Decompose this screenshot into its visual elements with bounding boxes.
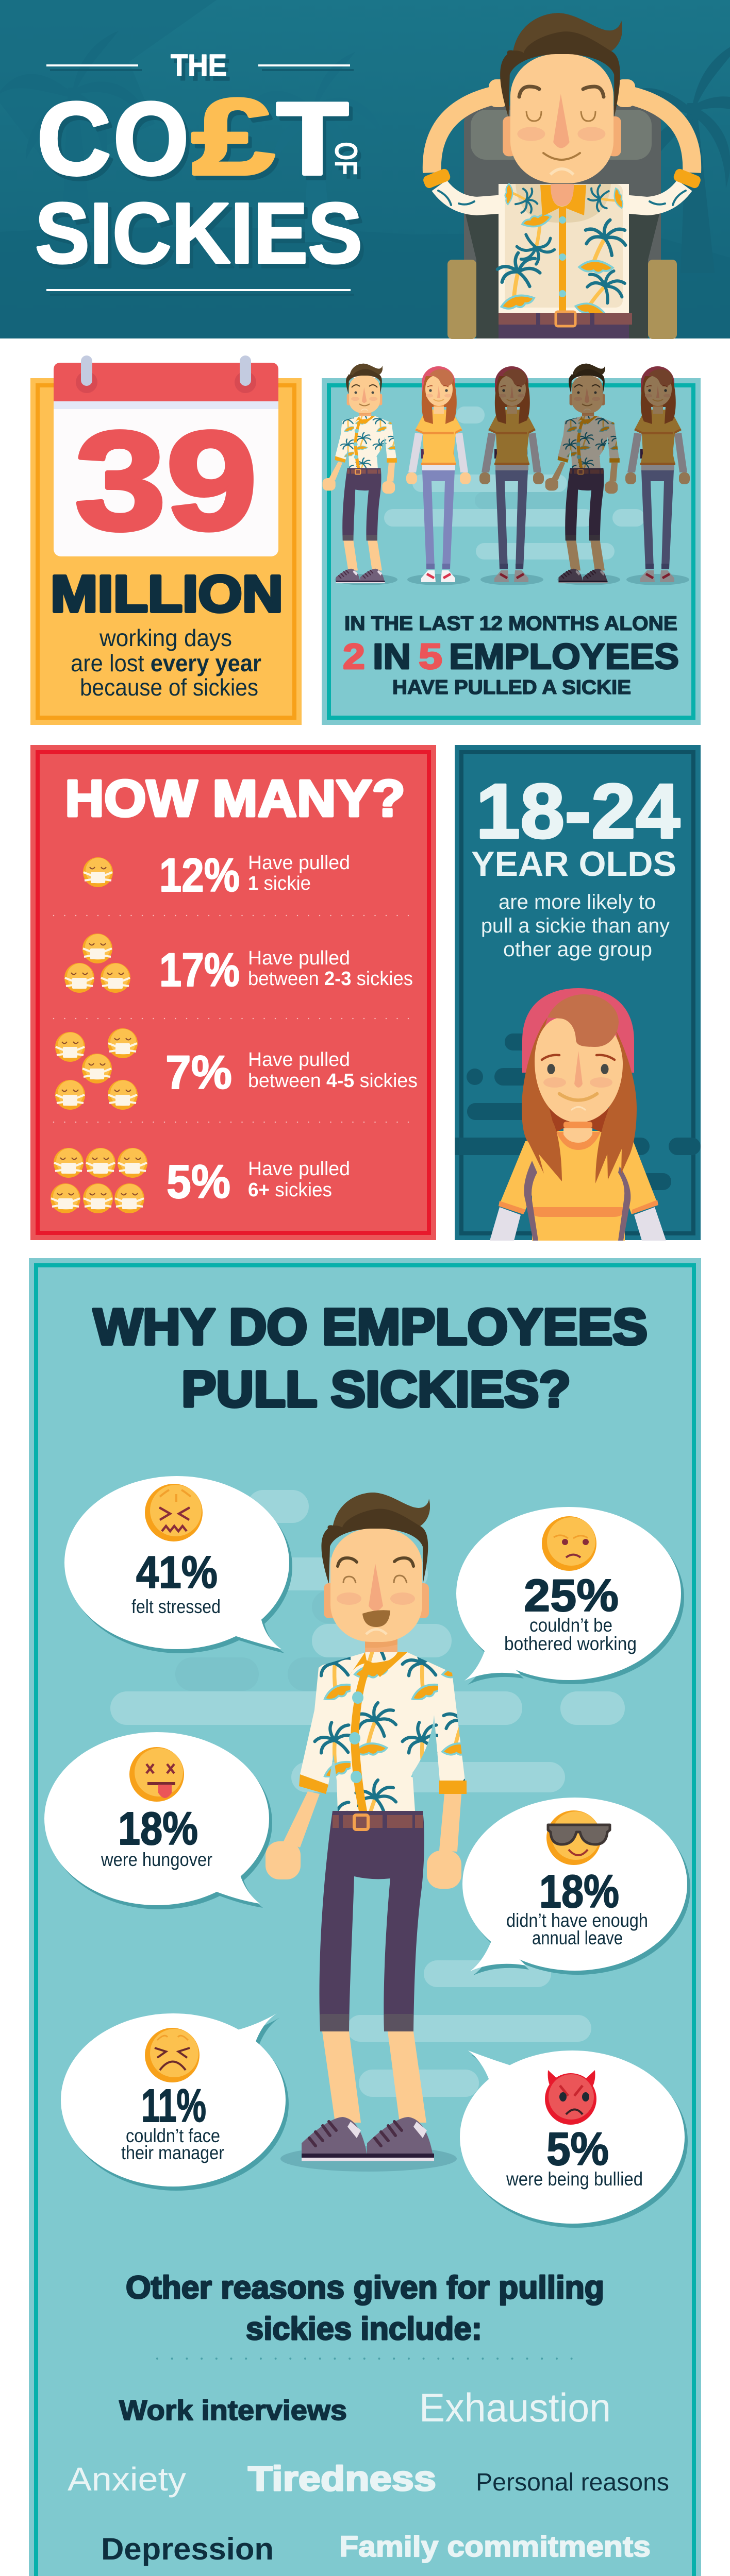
bubble: 25 percent could not be bothered: couldn’t be	[529, 1615, 612, 1636]
bubble: 5 percent bullied: were being bullied	[506, 2168, 643, 2190]
icon: shirt palm print	[494, 182, 630, 324]
heading: why do employees: WHY DO EMPLOYEES	[93, 1298, 648, 1355]
row: 17 percent: 17%	[159, 944, 240, 996]
row: 5 percent	[51, 1148, 350, 1213]
title: O	[113, 81, 189, 196]
row: 7 percent	[55, 1028, 418, 1110]
text: last 12 months	[343, 613, 679, 699]
heading: how many: HOW MANY?	[65, 770, 405, 827]
heading: why do employees	[93, 1298, 648, 1417]
text: working days lost: because of sickies	[80, 674, 258, 701]
bubble: 41 percent felt stressed	[64, 1476, 289, 1649]
word cloud: other reasons	[68, 2385, 669, 2566]
bubble: 41 percent felt stressed: 41%	[136, 1547, 218, 1598]
illustration: young woman	[490, 988, 666, 1241]
bubble: 18 percent annual leave: didn’t have enough	[506, 1910, 648, 1931]
bubble: 41 percent felt stressed: felt stressed	[131, 1596, 221, 1617]
heading: million: MILLION	[51, 565, 283, 623]
row: 17 percent: Have pulled	[248, 947, 350, 969]
row: 17 percent	[64, 934, 413, 996]
bubble: 11 percent could not face manager	[61, 2013, 286, 2187]
bubble: 25 percent could not be bothered: 25%	[524, 1570, 619, 1621]
row: 5 percent: 6+ sickies	[248, 1179, 332, 1201]
row: 7 percent: Have pulled	[248, 1049, 350, 1071]
title: SICKIES	[35, 185, 362, 281]
illustration: laughing man	[266, 1493, 467, 2172]
bubble: 18 percent annual leave: annual leave	[532, 1927, 623, 1948]
bubble: 18 percent hungover: 18%	[118, 1803, 198, 1855]
text: last 12 months: IN	[373, 636, 411, 676]
header banner	[0, 0, 730, 339]
heading: other reasons: sickies include:	[246, 2311, 482, 2347]
row: 12 percent: 12%	[159, 849, 240, 902]
bubble: 11 percent could not face manager: couldn’t face	[126, 2125, 220, 2146]
text: more likely: pull a sickie than any	[481, 914, 670, 937]
row: 12 percent: 1 sickie	[248, 873, 311, 894]
title: THE	[171, 48, 227, 82]
heading: other reasons	[126, 2270, 604, 2347]
bubble: 18 percent hungover: were hungover	[101, 1849, 212, 1870]
text: working days lost	[71, 624, 261, 701]
word cloud: other reasons: Depression	[101, 2532, 274, 2566]
bubble: 11 percent could not face manager: their manager	[121, 2142, 224, 2163]
text: last 12 months: IN THE LAST 12 MONTHS ALONE	[344, 613, 677, 635]
text: more likely: other age group	[503, 938, 652, 961]
text: last 12 months: EMPLOYEES	[449, 636, 679, 676]
word cloud: other reasons: Exhaustion	[419, 2385, 611, 2430]
icon: upset face	[145, 2028, 200, 2082]
heading: other reasons: Other reasons given for pulling	[126, 2270, 604, 2306]
title: C	[37, 81, 111, 196]
row: 5 percent: 5%	[167, 1156, 230, 1208]
bubble: 5 percent bullied: 5%	[546, 2124, 609, 2175]
text: more likely: are more likely to	[499, 891, 656, 913]
text: more likely	[481, 891, 670, 961]
icon: calendar: 39	[75, 402, 257, 559]
bubble: 11 percent could not face manager: 11%	[141, 2080, 206, 2132]
row: 7 percent: 7%	[165, 1046, 232, 1099]
bubble: 25 percent could not be bothered: bothered working	[504, 1633, 637, 1654]
bubble: 18 percent annual leave: 18%	[539, 1866, 619, 1918]
row: 7 percent: between 4-5 sickies	[248, 1070, 418, 1092]
bubble: 18 percent hungover	[44, 1732, 269, 1905]
row: 12 percent: Have pulled	[248, 852, 350, 874]
word cloud: other reasons: Anxiety	[68, 2461, 186, 2498]
bubble: 5 percent bullied	[460, 2050, 685, 2224]
heading: why do employees: PULL SICKIES?	[181, 1361, 571, 1417]
row: 5 percent: Have pulled	[248, 1158, 350, 1180]
panel: why do employees pull sickies	[29, 1258, 701, 2576]
title: £	[192, 76, 275, 197]
panel: 2 in 5 employees	[322, 364, 701, 725]
icon: devil face	[545, 2070, 596, 2125]
icon: stressed face	[145, 1484, 203, 1541]
word cloud: other reasons: Work interviews	[119, 2394, 347, 2426]
text: working days lost: working days	[99, 624, 232, 651]
illustration: five employees	[323, 364, 690, 585]
row: 12 percent	[83, 849, 350, 902]
heading: year olds: YEAR OLDS	[471, 844, 676, 884]
title	[35, 48, 363, 291]
icon: hungover face	[129, 1747, 184, 1802]
row: 17 percent: between 2-3 sickies	[248, 968, 413, 990]
word cloud: other reasons: Personal reasons	[476, 2469, 669, 2496]
word cloud: other reasons: Tiredness	[248, 2459, 436, 2498]
illustration: relaxing man in chair	[422, 13, 702, 339]
panel: 39 million	[30, 355, 302, 725]
bubble: 18 percent annual leave	[462, 1798, 687, 1971]
text: last 12 months: HAVE PULLED A SICKIE	[392, 676, 631, 699]
icon: sunglasses face	[546, 1810, 610, 1865]
text: working days lost: are lost every year	[71, 650, 261, 676]
panel: how many	[30, 745, 436, 1240]
text: last 12 months: 5	[419, 636, 442, 676]
word cloud: other reasons: Family commitments	[339, 2530, 651, 2563]
panel: 18-24 year olds	[455, 745, 701, 1241]
title: OF	[328, 142, 363, 175]
icon: calendar	[54, 355, 278, 559]
text: last 12 months: 2	[343, 636, 365, 676]
title: T	[276, 81, 349, 196]
bubble: 25 percent could not be bothered	[456, 1507, 681, 1681]
heading: 18-24: 18-24	[476, 768, 680, 854]
icon: unimpressed face	[542, 1516, 596, 1571]
